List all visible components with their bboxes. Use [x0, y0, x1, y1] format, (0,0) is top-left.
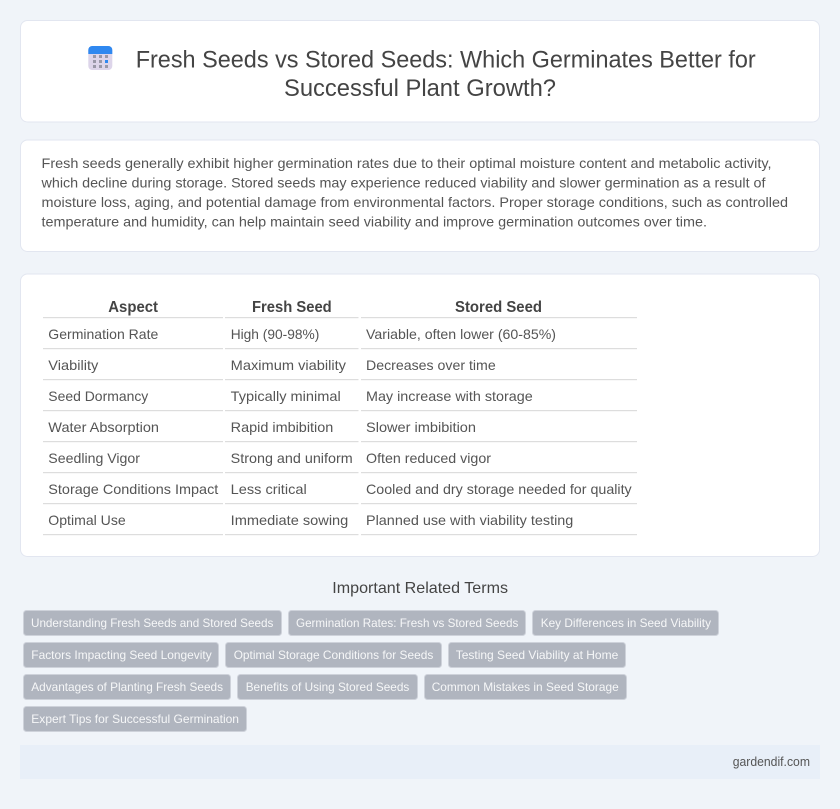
tag: Factors Impacting Seed Longevity [31, 648, 212, 662]
row: seedling vigor: Often reduced vigor [366, 450, 491, 466]
text block: intro [40, 155, 788, 230]
tag: Testing Seed Viability at Home [456, 648, 619, 662]
table header [108, 299, 542, 316]
text block: intro: which decline during storage. Stored seeds may experience reduced viability and slower germination as a result of [40, 175, 766, 191]
row: water absorption: Water Absorption [48, 419, 159, 435]
title: Successful Plant Growth? [284, 75, 556, 102]
row: germination rate: Variable, often lower (60-85%) [366, 326, 556, 342]
tag [238, 674, 418, 700]
tag [448, 642, 626, 668]
row: germination rate: Germination Rate [48, 326, 159, 342]
text block: intro: moisture loss, aging, and potential damage from environmental factors. Proper storage conditions, such as controlled [42, 194, 788, 210]
tag [288, 610, 526, 636]
icon: calendar [88, 46, 112, 70]
tag [24, 706, 246, 732]
table header: Aspect [108, 299, 159, 316]
tag: Benefits of Using Stored Seeds [246, 680, 409, 694]
tag [532, 610, 718, 636]
row: seedling vigor [48, 450, 491, 466]
row: seedling vigor: Strong and uniform [231, 450, 353, 466]
row: viability [48, 357, 496, 373]
related term tags [24, 610, 718, 732]
row: seed dormancy: Seed Dormancy [48, 388, 148, 404]
tag: Germination Rates: Fresh vs Stored Seeds [296, 616, 518, 630]
row: storage conditions impact [48, 481, 632, 497]
row: water absorption: Rapid imbibition [231, 419, 333, 435]
tag [24, 610, 282, 636]
text block: intro: Fresh seeds generally exhibit higher germination rates due to their optimal moisture content and metabolic activity, [42, 155, 772, 171]
row: germination rate: High (90-98%) [231, 326, 319, 342]
row: storage conditions impact: Less critical [231, 481, 307, 497]
row: viability: Decreases over time [366, 357, 496, 373]
row: seed dormancy: May increase with storage [366, 388, 533, 404]
table header: Fresh Seed [252, 299, 332, 316]
panel: intro paragraph [20, 140, 820, 252]
row: seedling vigor: Seedling Vigor [48, 450, 140, 466]
tag [24, 674, 230, 700]
tag [24, 642, 218, 668]
row: storage conditions impact: Storage Conditions Impact [48, 481, 218, 497]
title [136, 46, 756, 102]
row: seed dormancy: Typically minimal [231, 388, 341, 404]
row: water absorption [48, 419, 476, 435]
tag [226, 642, 442, 668]
heading: related terms: Important Related Terms [332, 580, 508, 597]
row: optimal use: Optimal Use [48, 512, 126, 528]
row: water absorption: Slower imbibition [366, 419, 476, 435]
footer: gardendif.com [733, 755, 810, 769]
row: optimal use: Planned use with viability testing [366, 512, 573, 528]
title: Fresh Seeds vs Stored Seeds: Which Germinates Better for [136, 46, 756, 74]
row: storage conditions impact: Cooled and dry storage needed for quality [366, 481, 632, 497]
row: optimal use: Immediate sowing [231, 512, 348, 528]
tag: Optimal Storage Conditions for Seeds [234, 648, 433, 662]
row: seed dormancy [48, 388, 533, 404]
row: optimal use [48, 512, 573, 528]
row: viability: Maximum viability [231, 357, 346, 373]
tag: Understanding Fresh Seeds and Stored Seeds [31, 616, 273, 630]
tag: Common Mistakes in Seed Storage [432, 680, 619, 694]
tag: Key Differences in Seed Viability [541, 616, 711, 630]
panel: header [20, 20, 820, 122]
tag [424, 674, 626, 700]
row: germination rate [48, 326, 556, 342]
footer [20, 745, 820, 779]
row: viability: Viability [48, 357, 98, 373]
tag: Expert Tips for Successful Germination [31, 712, 239, 726]
tag: Advantages of Planting Fresh Seeds [31, 680, 223, 694]
panel: comparison table [20, 274, 820, 556]
table header: Stored Seed [455, 299, 542, 316]
text block: intro: temperature and humidity, can help maintain seed viability and improve germination outcomes over time. [42, 214, 707, 230]
